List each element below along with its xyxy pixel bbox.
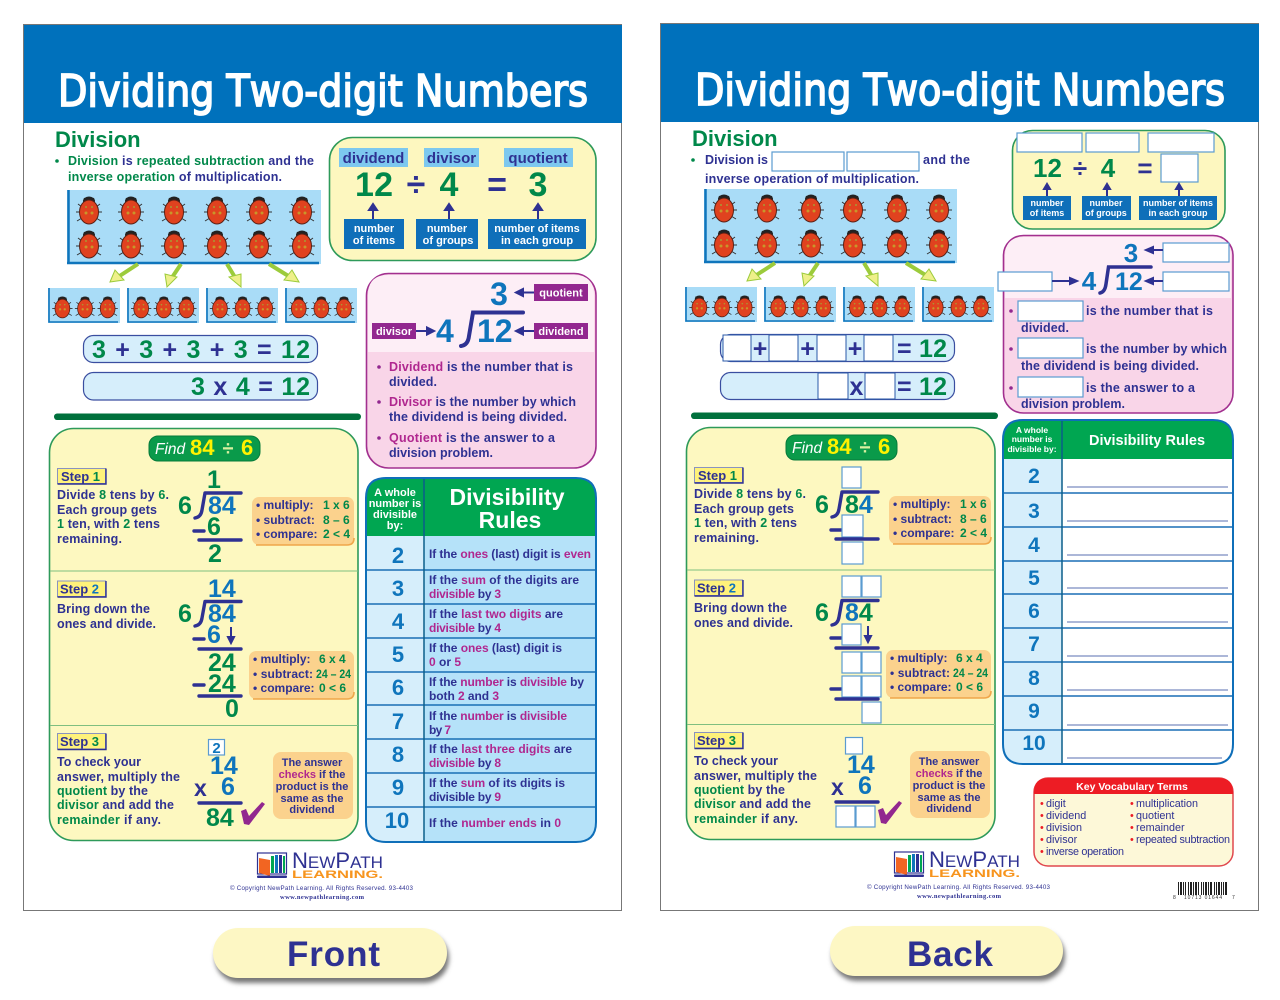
green arrows	[110, 264, 299, 287]
vocabulary list: •	[1130, 822, 1134, 834]
find pill: 6	[241, 435, 253, 460]
long division diagram back	[998, 238, 1229, 296]
callout: step 3 back: checks if the	[916, 768, 982, 780]
step 3 back: divisor and add the	[694, 797, 811, 811]
table numbers: 5	[392, 642, 404, 667]
vocabulary list: division	[1046, 822, 1082, 834]
long division diagram back: 12	[1115, 268, 1143, 296]
step 2: ones and divide.	[57, 617, 156, 631]
table numbers back: 3	[1028, 500, 1040, 523]
table: divisibility rules	[366, 478, 596, 842]
callout: step 3: The answer	[282, 757, 343, 769]
callout: step 2 back	[886, 650, 991, 698]
callout: step 2 back: 24 – 24	[953, 668, 989, 680]
step 2 back: ones and divide.	[694, 616, 793, 630]
long division blanks step 1: 84	[845, 491, 873, 519]
panel: key vocabulary terms	[1034, 778, 1233, 866]
labels: dividend divisor quotient: divisor	[427, 150, 476, 167]
text: division definition with blanks: inverse operation of multiplication.	[705, 172, 919, 186]
button: Back	[830, 926, 1065, 981]
button: Front	[213, 928, 449, 983]
logo: NewPath Learning front	[230, 848, 414, 901]
step 3: divisor and add the	[57, 798, 174, 812]
button: Back: Back	[907, 935, 994, 974]
callout: step 3 back: same as the	[918, 792, 980, 804]
table numbers: 6	[392, 675, 404, 700]
long division diagram back: 3	[1124, 238, 1138, 268]
step 1 back	[694, 467, 991, 564]
vocabulary list: remainder	[1136, 822, 1185, 834]
find pill back: ÷	[860, 437, 871, 459]
callout: step 2 back: 0 < 6	[956, 680, 983, 694]
multiplication check: 14	[210, 752, 238, 780]
panel: find 84 divided by 6	[50, 428, 358, 840]
table header: divisible	[373, 509, 417, 521]
definitions: the dividend is being divided.	[389, 410, 567, 424]
multiplication check: x	[194, 775, 207, 801]
table numbers back: 4	[1028, 534, 1040, 557]
long division step 2: 84	[208, 600, 236, 628]
table rules: If the number is divisible by	[429, 675, 584, 689]
equation: repeated addition: 3 + 3 + 3 + 3 = 12	[92, 336, 310, 364]
table: divisibility rules blank	[1003, 420, 1233, 764]
callout: step 1: 2 < 4	[323, 527, 350, 541]
callout: step 2 back: • compare:	[890, 680, 952, 694]
definitions with blanks: is the number that is	[1086, 304, 1213, 318]
definitions: Divisor is the number by which	[389, 395, 576, 409]
long division step 1: 1	[207, 466, 221, 494]
table rules: by 7	[429, 723, 451, 737]
logo: NewPath Learning back: www.newpathlearning.com	[917, 893, 1002, 900]
definitions: divided.	[389, 375, 437, 389]
callout: step 1: 8 – 6	[323, 513, 350, 527]
step 1 back: 1 ten, with 2 tens	[694, 516, 797, 530]
table rules: If the number ends in 0	[429, 816, 561, 830]
long division step 2: 14	[208, 575, 236, 603]
definitions: Quotient is the answer to a	[389, 431, 556, 445]
multiplication check: 84	[206, 804, 234, 832]
callout: step 1	[252, 497, 354, 545]
long division diagram: 4	[436, 313, 454, 349]
callout: step 2: 0 < 6	[319, 681, 346, 695]
equation blanks: addition: +	[848, 335, 862, 363]
step 3 back: Step 3	[697, 733, 736, 748]
step 3 back: remainder if any.	[694, 812, 798, 826]
multiplication check blanks	[831, 738, 902, 827]
multiplication check blanks: x	[831, 774, 844, 800]
barcode: 7	[1232, 895, 1235, 901]
long division diagram: quotient	[539, 288, 583, 300]
multiplication check: 2	[212, 740, 221, 757]
long division step 1: 6	[207, 513, 221, 541]
text: division definition with blanks: and the	[923, 153, 970, 167]
table numbers: 4	[392, 609, 405, 634]
panel: division sentence	[330, 138, 596, 260]
step 3: answer, multiply the	[57, 770, 180, 784]
table numbers back	[1022, 465, 1046, 755]
step 1: remaining.	[57, 532, 122, 546]
step 1 back: Step 1	[698, 468, 737, 483]
header band front	[24, 25, 622, 123]
step 3: remainder if any.	[57, 813, 161, 827]
table rules: If the ones (last) digit is even	[429, 547, 591, 561]
descriptor boxes: in each group	[501, 235, 573, 247]
long division step 1: 2	[208, 540, 222, 568]
long division step 2: 24	[208, 649, 236, 677]
table header: Rules	[479, 507, 541, 533]
long division step 2: 6	[207, 621, 221, 649]
barcode	[1173, 888, 1235, 901]
logo: NewPath Learning back	[867, 847, 1051, 900]
step 3: To check your	[57, 755, 141, 769]
find pill: Find	[155, 441, 187, 458]
callout: step 1 back	[889, 496, 991, 544]
callout: step 3	[273, 752, 353, 819]
equation 12 divided by 4 equals 3: =	[487, 166, 507, 204]
long division step 2: 6	[178, 600, 192, 628]
vocabulary list: •	[1040, 810, 1044, 822]
table header	[369, 484, 565, 533]
descriptor boxes back: in each group	[1148, 208, 1208, 218]
table rules: If the ones (last) digit is	[429, 641, 562, 655]
green arrows back	[747, 263, 936, 286]
callout: step 3: same as the	[281, 793, 343, 805]
equation back: =	[1137, 153, 1153, 183]
table rules: If the last two digits are	[429, 607, 563, 621]
vocabulary list: •	[1130, 834, 1134, 846]
step 1: Divide 8 tens by 6.	[57, 488, 169, 502]
callout: step 2: 6 x 4	[319, 652, 346, 666]
panel: front poster	[24, 24, 622, 910]
heading: Division back: Division	[692, 126, 778, 151]
definitions with blanks: division problem.	[1021, 397, 1125, 411]
text: division definition: Division is repeated subtraction and the	[68, 154, 314, 168]
panel: parts of division back	[998, 236, 1233, 413]
step 2: Bring down the	[57, 602, 150, 616]
descriptor boxes back: number of items	[1143, 198, 1213, 208]
equation blanks: addition: = 12	[897, 335, 947, 363]
table header back: Divisibility Rules	[1089, 433, 1205, 449]
descriptor boxes: number of items	[494, 223, 580, 235]
labels: dividend divisor quotient: quotient	[508, 150, 568, 167]
vocabulary list: quotient	[1136, 810, 1174, 822]
descriptor boxes back: of groups	[1085, 208, 1127, 218]
long division blanks step 1: 6	[815, 491, 829, 519]
callout: step 1 back: 8 – 6	[960, 512, 987, 526]
callout: step 2: 24 – 24	[316, 669, 352, 681]
long division blanks step 2	[815, 576, 881, 723]
long division blanks step 2: 84	[845, 599, 873, 627]
descriptor boxes back: number	[1030, 198, 1064, 208]
callout: step 1 back: • subtract:	[893, 512, 952, 526]
descriptor boxes back	[1023, 196, 1217, 220]
descriptor boxes: of groups	[423, 235, 473, 247]
find pill: 84	[190, 435, 215, 460]
step 1	[57, 466, 354, 568]
long division blanks step 2: 6	[815, 599, 829, 627]
table numbers: 10	[385, 808, 409, 833]
find pill: ÷	[223, 438, 234, 460]
long division diagram: dividend	[538, 326, 584, 338]
descriptor boxes back: of items	[1030, 208, 1064, 218]
ladybug groups back	[685, 287, 994, 322]
vocabulary list: •	[1040, 834, 1044, 846]
long division diagram back: 4	[1082, 266, 1097, 296]
callout: step 1: • multiply:	[256, 498, 314, 512]
table numbers: 7	[392, 709, 404, 734]
long division step 1: 6	[178, 492, 192, 520]
step 3: Step 3	[60, 734, 99, 749]
vocabulary list: divisor	[1046, 834, 1078, 846]
vocabulary list: •	[1040, 798, 1044, 810]
table header: by:	[387, 520, 403, 532]
table numbers back: 7	[1028, 633, 1040, 656]
table numbers back: 2	[1028, 465, 1040, 488]
definitions with blanks: divided.	[1021, 321, 1069, 335]
definitions with blanks: is the answer to a	[1086, 381, 1196, 395]
table header: number is	[369, 498, 421, 510]
blank label boxes	[1017, 133, 1214, 182]
definitions with blanks: the dividend is being divided.	[1021, 359, 1199, 373]
vocabulary list: repeated subtraction	[1136, 834, 1230, 846]
text: division definition with blanks	[691, 152, 970, 186]
step 2: Step 2	[60, 582, 99, 596]
descriptor boxes	[344, 219, 586, 249]
table numbers back: 9	[1028, 700, 1040, 723]
definitions: Dividend is the number that is	[389, 360, 573, 374]
equation 12 divided by 4 equals 3: 12	[355, 166, 393, 204]
table rules: If the sum of its digits is	[429, 776, 565, 790]
step 1: 1 ten, with 2 tens	[57, 517, 160, 531]
table rules: divisible by 3	[429, 587, 501, 601]
ladybug groups	[48, 288, 357, 323]
callout: step 1 back: • multiply:	[893, 497, 951, 511]
long division step 1: 84	[208, 492, 236, 520]
labels: dividend divisor quotient	[339, 148, 573, 167]
panel: division sentence back	[1012, 130, 1225, 229]
find pill back: 6	[878, 434, 890, 459]
table numbers: 8	[392, 742, 404, 767]
table numbers: 9	[392, 775, 404, 800]
equation blanks: addition	[720, 334, 954, 363]
equation 12 divided by 4 equals 3: 4	[440, 166, 459, 204]
long division step 2: 24	[208, 670, 236, 698]
callout: step 3: checks if the	[279, 769, 345, 781]
descriptor boxes: number	[354, 223, 395, 235]
table rules: divisible by 8	[429, 756, 501, 770]
step 3: quotient by the	[57, 784, 148, 798]
callout: step 2	[249, 651, 354, 699]
find pill back	[786, 434, 897, 460]
panel: back poster	[660, 24, 1259, 910]
arrows up back	[1044, 184, 1182, 196]
step 2 back	[694, 576, 991, 723]
step 1 back: Divide 8 tens by 6.	[694, 487, 806, 501]
logo: NewPath Learning back: © Copyright NewPath Learning. All Rights Reserved. 93-4403	[867, 884, 1051, 891]
table header back: A whole	[1016, 425, 1048, 435]
callout: step 1 back: • compare:	[893, 526, 955, 540]
multiplication check: 6	[221, 773, 235, 801]
text: division definition with blanks: Division is	[705, 153, 768, 167]
step 3 back: answer, multiply the	[694, 769, 817, 783]
logo: NewPath Learning front: LEARNING.	[292, 869, 383, 881]
step 2 back: Step 2	[697, 580, 736, 596]
long division diagram: divisor	[376, 326, 413, 338]
logo: NewPath Learning front: © Copyright NewPath Learning. All Rights Reserved. 93-4403	[230, 885, 414, 892]
table numbers back: 8	[1028, 667, 1040, 690]
callout: step 1: 1 x 6	[323, 498, 350, 512]
header band back	[661, 24, 1259, 122]
definitions: division problem.	[389, 446, 493, 460]
equation 12 divided by 4 equals 3: ÷	[407, 166, 425, 204]
callout: step 2 back: • multiply:	[890, 651, 948, 665]
vocabulary list: multiplication	[1136, 798, 1198, 810]
step 3 back	[694, 732, 990, 827]
ladybug array	[67, 190, 321, 264]
table rules: both 2 and 3	[429, 689, 499, 703]
table rules: If the last three digits are	[429, 742, 572, 756]
labels: dividend divisor quotient: dividend	[343, 150, 404, 167]
text: division definition	[55, 154, 314, 184]
callout: step 2 back: • subtract:	[890, 666, 950, 680]
heading: Division: Division	[55, 127, 141, 152]
callout: step 3 back	[910, 751, 990, 818]
callout: step 2 back: 6 x 4	[956, 651, 983, 665]
table rules: 0 or 5	[429, 655, 461, 669]
equation back: ÷	[1073, 153, 1087, 183]
vocabulary list: •	[1130, 798, 1134, 810]
step 1 back: Each group gets	[694, 502, 794, 516]
logo: NewPath Learning front: www.newpathlearning.com	[280, 894, 365, 901]
multiplication check blanks: 6	[858, 772, 872, 800]
vocabulary list: •	[1040, 822, 1044, 834]
long division step 1	[178, 466, 241, 568]
equation: multiplication: 3 x 4 = 12	[191, 373, 310, 401]
long division diagram: 3	[490, 276, 508, 312]
step 1 back: remaining.	[694, 531, 759, 545]
title front: Dividing Two-digit Numbers	[58, 66, 588, 117]
find pill back: Find	[792, 440, 824, 457]
table header: Divisibility	[449, 484, 565, 510]
callout: step 2: • multiply:	[253, 652, 311, 666]
table header: A whole	[374, 487, 416, 499]
callout: step 1: • compare:	[256, 527, 318, 541]
text: division definition: inverse operation of multiplication.	[68, 170, 282, 184]
step 3	[57, 734, 353, 832]
descriptor boxes back: number	[1089, 198, 1123, 208]
callout: step 3 back: product is the	[913, 780, 985, 792]
table rules: If the number is divisible	[429, 709, 567, 723]
vocabulary list: •	[1130, 810, 1134, 822]
callout: step 1 back: 1 x 6	[960, 497, 987, 511]
table numbers back: 5	[1028, 567, 1040, 590]
equation blanks: multiplication: x	[850, 373, 864, 401]
equation blanks: addition: +	[753, 335, 767, 363]
table numbers back: 6	[1028, 600, 1040, 623]
equation blanks: multiplication: = 12	[897, 373, 947, 401]
table numbers: 2	[392, 543, 404, 568]
barcode: 10713 01644	[1184, 895, 1222, 901]
arrows up	[369, 204, 542, 219]
equation back: 4	[1101, 153, 1116, 183]
table header back: divisible by:	[1007, 444, 1057, 454]
equation blanks: addition: +	[800, 335, 815, 363]
vocabulary list: inverse operation	[1046, 846, 1124, 858]
equation 12 divided by 4 equals 3	[355, 166, 547, 204]
barcode: 8	[1173, 895, 1176, 901]
callout: step 2: • compare:	[253, 681, 315, 695]
definitions	[377, 360, 576, 460]
equation back: 12	[1033, 153, 1062, 183]
long division diagram	[372, 276, 588, 349]
panel: parts of division	[366, 274, 596, 468]
logo: NewPath Learning front: NEWPATH	[292, 848, 383, 873]
long division step 2	[178, 575, 241, 723]
table rules: divisible by 9	[429, 790, 501, 804]
step 2	[57, 575, 354, 723]
long division diagram: 12	[477, 313, 513, 349]
vocabulary list	[1040, 798, 1230, 858]
find pill	[149, 435, 260, 461]
step 3 back: quotient by the	[694, 783, 785, 797]
long division step 2: 0	[225, 695, 239, 723]
vocabulary list: dividend	[1046, 810, 1086, 822]
table rules: If the sum of the digits are	[429, 573, 579, 587]
find pill back: 84	[827, 434, 852, 459]
descriptor boxes: of items	[353, 235, 395, 247]
long division blanks step 1	[815, 467, 878, 564]
table header back	[1007, 425, 1205, 454]
definitions with blanks: is the number by which	[1086, 342, 1227, 356]
vocabulary list: •	[1040, 846, 1044, 858]
vocabulary list: digit	[1046, 798, 1066, 810]
table rules	[429, 547, 591, 830]
table header back: number is	[1012, 434, 1053, 444]
button: Front: Front	[287, 935, 380, 974]
multiplication check blanks: 14	[847, 751, 875, 779]
multiplication check	[194, 740, 265, 832]
logo: NewPath Learning back: LEARNING.	[929, 868, 1020, 880]
table numbers: 3	[392, 576, 404, 601]
table rules: divisible by 4	[429, 621, 501, 635]
equation: multiplication	[84, 372, 318, 401]
callout: step 3 back: The answer	[919, 756, 980, 768]
definitions with blanks	[1009, 301, 1227, 411]
callout: step 1: • subtract:	[256, 513, 315, 527]
logo: NewPath Learning back: NEWPATH	[929, 847, 1020, 872]
callout: step 1 back: 2 < 4	[960, 526, 987, 540]
callout: step 3: product is the	[276, 781, 348, 793]
panel: key vocabulary terms: Key Vocabulary Terms	[1076, 781, 1188, 793]
step 3 back: To check your	[694, 754, 778, 768]
descriptor boxes: number	[427, 223, 468, 235]
callout: step 3: dividend	[289, 804, 335, 816]
equation back	[1033, 153, 1153, 183]
step 1: Each group gets	[57, 503, 157, 517]
equation blanks: multiplication	[720, 372, 954, 401]
table numbers back: 10	[1022, 732, 1046, 755]
table numbers	[385, 543, 409, 833]
callout: step 3 back: dividend	[926, 803, 972, 815]
step 2 back: Bring down the	[694, 601, 787, 615]
step 1: Step 1	[61, 469, 100, 484]
equation 12 divided by 4 equals 3: 3	[529, 166, 547, 204]
callout: step 2: • subtract:	[253, 667, 313, 681]
panel: find 84 divided by 6 back	[686, 428, 995, 840]
ladybug array back	[704, 189, 957, 263]
